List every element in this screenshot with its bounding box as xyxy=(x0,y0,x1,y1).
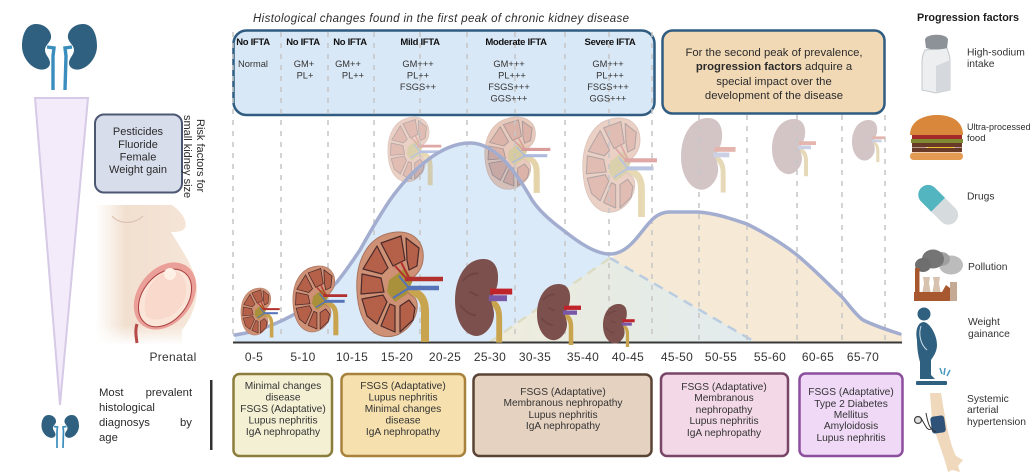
age axis labels: 45-50 xyxy=(661,350,693,364)
panel: second peak callout: special impact over the xyxy=(716,76,832,88)
age axis labels: 35-40 xyxy=(567,350,599,364)
text: drugs: Drugs xyxy=(967,192,994,202)
column: moderate IFTA: GM+++ xyxy=(493,59,525,69)
chart title: Histological changes found in the first peak of chronic kidney disease xyxy=(253,13,629,25)
kidney: pale grey age 65-70 xyxy=(852,120,885,162)
column: no IFTA GM++: No IFTA xyxy=(333,37,367,48)
diagnosis box: 25-45 years: FSGS (Adaptative) xyxy=(520,387,606,398)
age axis labels: Prenatal xyxy=(149,350,197,364)
age axis labels: 30-35 xyxy=(519,350,551,364)
text: systemic arterial hypertension: hypertension xyxy=(967,417,1026,428)
dashed line: second peak rise xyxy=(490,258,610,342)
diagnosis box: 45-60 years: FSGS (Adaptative) xyxy=(681,382,767,393)
diagnosis box: 25-45 years: IgA nephropathy xyxy=(526,421,601,432)
age wedge triangle xyxy=(35,98,88,405)
diagnosis box: 45-60 years: Membranous xyxy=(694,393,754,404)
diagnosis box: 15-25 years: FSGS (Adaptative) xyxy=(360,381,446,392)
diagnosis box: 25-45 years: Lupus nephritis xyxy=(528,410,598,421)
age axis labels: 5-10 xyxy=(290,350,316,364)
panel: second peak callout xyxy=(662,30,884,114)
diagnosis box: 15-25 years: IgA nephropathy xyxy=(366,427,441,438)
area: first peak xyxy=(235,143,610,342)
kidney: dark age 35-40 xyxy=(537,284,581,345)
column: severe IFTA: GM+++ xyxy=(592,59,624,69)
diagnosis box: 0-15 years: Lupus nephritis xyxy=(248,416,318,426)
kidney: pale moderate IFTA xyxy=(485,117,550,193)
icon: kidneys at bottom of age timeline xyxy=(42,415,79,448)
icon: arm with blood pressure cuff xyxy=(914,393,963,472)
diagnosis box: 60-70 years: Type 2 Diabetes xyxy=(814,399,888,410)
kidney: dark age 25-30 xyxy=(455,259,512,343)
panel: risk factors for small kidney size: Fluoride xyxy=(118,139,158,151)
diagnosis box: 15-25 years: Minimal changes xyxy=(365,404,441,415)
age axis labels: 20-25 xyxy=(429,350,461,364)
column: no IFTA GM+: GM+ xyxy=(294,59,314,69)
kidney: pale grey age 45-50 xyxy=(681,118,736,193)
panel: risk factors for small kidney size: Weight gain xyxy=(109,164,167,176)
diagnosis box: 0-15 years xyxy=(234,374,332,456)
illustration: pregnant woman and fetus xyxy=(95,205,209,345)
column: no IFTA normal: No IFTA xyxy=(236,37,270,48)
text: systemic arterial hypertension: Systemic xyxy=(967,394,1009,405)
rotated label: risk factors for small kidney size: Risk factors for xyxy=(194,119,206,193)
diagnosis box: 0-15 years: Minimal changes xyxy=(245,381,321,392)
age axis labels: 55-60 xyxy=(754,350,786,364)
text: ultra-processed food: food xyxy=(967,133,986,144)
column: mild IFTA: GM+++ xyxy=(402,59,434,69)
diagnosis box: 25-45 years xyxy=(474,374,652,456)
column: no IFTA GM+: PL+ xyxy=(297,70,313,80)
column: mild IFTA xyxy=(400,37,440,92)
label: most prevalent histological diagnosis: by xyxy=(180,417,192,429)
curve: total prevalence xyxy=(235,143,900,335)
icon: salt shaker xyxy=(922,35,950,93)
text: weight gainance: gainance xyxy=(968,329,1010,340)
kidney: age 0-5 xyxy=(241,288,280,338)
panel: histological changes first peak xyxy=(234,30,654,115)
column: moderate IFTA: Moderate IFTA xyxy=(485,37,547,48)
age axis labels: 65-70 xyxy=(847,350,879,364)
icon: kidneys at top of age timeline xyxy=(22,24,97,90)
diagnosis box: 45-60 years: nephropathy xyxy=(696,405,753,416)
panel: second peak callout: For the second peak of prevalence, xyxy=(685,47,863,59)
rotated label: risk factors for small kidney size: small kidney size xyxy=(181,115,193,198)
column: no IFTA GM++ xyxy=(333,37,367,80)
diagnosis box: 45-60 years: Lupus nephritis xyxy=(689,416,759,427)
text: high-sodium intake: intake xyxy=(967,59,995,70)
kidney: age 15-20 xyxy=(357,232,443,342)
panel: risk factors for small kidney size: Female xyxy=(120,152,156,164)
age axis labels: 50-55 xyxy=(705,350,737,364)
text: high-sodium intake: High-sodium xyxy=(967,48,1025,58)
panel: second peak callout: development of the disease xyxy=(705,90,843,102)
axis baseline xyxy=(233,342,902,344)
diagnosis box: 60-70 years xyxy=(800,374,902,456)
diagnosis box: 0-15 years: IgA nephropathy xyxy=(246,427,321,438)
column: severe IFTA: GGS+++ xyxy=(590,94,626,104)
kidney: dark age 40-45 xyxy=(603,304,635,347)
column: mild IFTA: FSGS++ xyxy=(400,82,436,92)
chart: prevalence of chronic kidney disease by age xyxy=(235,143,902,342)
column: severe IFTA: PL+++ xyxy=(596,70,624,80)
diagnosis box: 45-60 years xyxy=(661,374,788,456)
age grid lines xyxy=(233,32,885,340)
kidney: age 5-10 xyxy=(293,266,347,335)
column: mild IFTA: PL++ xyxy=(407,70,429,80)
text: pollution: Pollution xyxy=(968,262,1008,273)
icon: factory with pollution xyxy=(914,250,963,301)
diagnosis box: 25-45 years: Membranous nephropathy xyxy=(504,398,623,409)
vertical divider xyxy=(210,380,212,450)
panel: second peak callout: progression factors adquire a xyxy=(696,61,853,73)
column: moderate IFTA: FSGS+++ xyxy=(488,82,530,92)
age axis labels: 10-15 xyxy=(336,350,368,364)
dashed line: first peak decline xyxy=(610,258,755,342)
kidney: pale severe IFTA xyxy=(583,118,657,217)
label: most prevalent histological diagnosis: diagnosys xyxy=(99,417,150,429)
text: systemic arterial hypertension: arterial xyxy=(967,405,998,416)
column: moderate IFTA: GGS+++ xyxy=(491,94,527,104)
diagnosis box: 60-70 years: Mellitus xyxy=(834,410,868,421)
age axis labels xyxy=(149,350,879,364)
column: no IFTA GM+ xyxy=(286,37,320,80)
age axis labels: 15-20 xyxy=(381,350,413,364)
text: weight gainance xyxy=(968,317,1010,340)
text: ultra-processed food xyxy=(967,122,1030,144)
column: severe IFTA: FSGS+++ xyxy=(587,82,629,92)
icon: burger xyxy=(910,115,963,160)
column: severe IFTA xyxy=(585,37,636,104)
rotated label: risk factors for small kidney size xyxy=(181,115,206,198)
label: most prevalent histological diagnosis xyxy=(99,387,193,444)
column: moderate IFTA xyxy=(485,37,547,104)
kidney: pale mild IFTA xyxy=(388,117,441,185)
diagnosis box: 0-15 years: disease xyxy=(265,392,301,404)
column: no IFTA GM+: No IFTA xyxy=(286,37,320,48)
diagnosis box: 0-15 years: FSGS (Adaptative) xyxy=(240,404,326,415)
diagnosis box: 60-70 years: Lupus nephritis xyxy=(816,433,886,444)
column: no IFTA normal xyxy=(236,37,270,69)
column: no IFTA normal: Normal xyxy=(238,59,268,69)
label: most prevalent histological diagnosis: age xyxy=(99,432,118,444)
column: mild IFTA: Mild IFTA xyxy=(400,37,440,48)
text: ultra-processed food: Ultra-processed xyxy=(967,122,1030,132)
column: no IFTA GM++: PL++ xyxy=(342,70,364,80)
area: overlap of both peaks xyxy=(490,258,755,342)
label: most prevalent histological diagnosis: histological xyxy=(99,402,155,414)
age axis labels: 40-45 xyxy=(612,350,644,364)
diagnosis box: 15-25 years: Lupus nephritis xyxy=(368,392,438,404)
text: weight gainance: Weight xyxy=(968,317,1000,328)
text: high-sodium intake xyxy=(967,48,1025,70)
column: moderate IFTA: PL+++ xyxy=(498,70,526,80)
age axis labels: 25-30 xyxy=(474,350,506,364)
area: second peak xyxy=(490,212,902,342)
heading: progression factors: Progression factors xyxy=(917,12,1019,24)
diagnosis box: 15-25 years xyxy=(342,374,465,456)
label: most prevalent histological diagnosis: Most prevalent xyxy=(99,387,193,399)
kidney: pale grey age 55-60 xyxy=(772,119,816,176)
icon: weight gain figure on scale xyxy=(916,308,950,385)
text: systemic arterial hypertension xyxy=(967,394,1026,428)
panel: risk factors for small kidney size: Pesticides xyxy=(113,126,164,138)
age axis labels: 0-5 xyxy=(245,350,263,364)
diagnosis box: 45-60 years: IgA nephropathy xyxy=(687,428,762,439)
panel: risk factors for small kidney size xyxy=(95,114,182,192)
diagnosis box: 60-70 years: Amyloidosis xyxy=(824,421,878,432)
icon: pill xyxy=(914,181,962,229)
diagnosis box: 15-25 years: disease xyxy=(385,416,421,426)
age axis labels: 60-65 xyxy=(802,350,834,364)
diagnosis box: 60-70 years: FSGS (Adaptative) xyxy=(808,387,894,398)
column: no IFTA GM++: GM++ xyxy=(335,59,361,69)
column: severe IFTA: Severe IFTA xyxy=(585,37,636,48)
